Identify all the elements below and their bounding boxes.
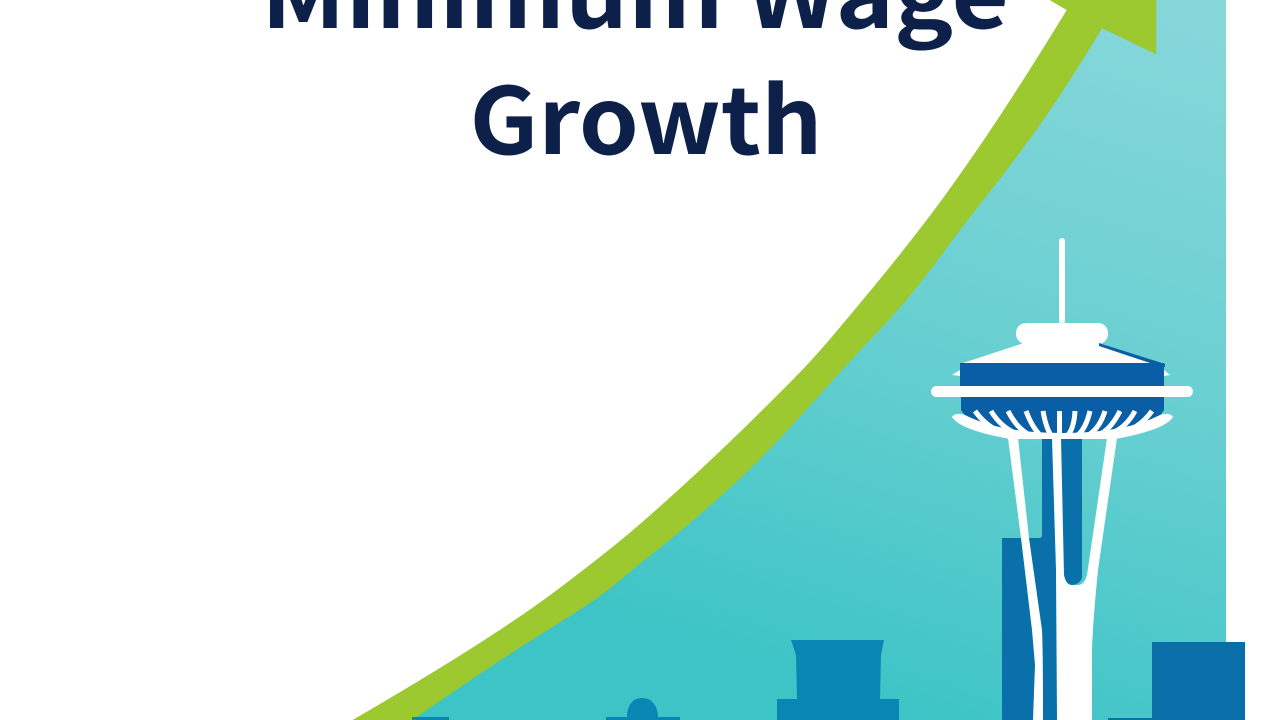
tower cap <box>1016 323 1108 344</box>
title: Growth <box>470 48 822 181</box>
blue bowl <box>961 397 1164 435</box>
antenna <box>1059 238 1065 324</box>
tower white body and right leg <box>1052 438 1117 720</box>
building: small dome <box>606 698 680 720</box>
building: tall behind tower <box>1002 438 1060 720</box>
tower blue core <box>1058 438 1082 585</box>
small roof tips <box>952 370 1170 376</box>
white deck ring <box>931 386 1193 397</box>
white saucer <box>952 414 1173 439</box>
observation deck blue band <box>960 363 1164 387</box>
title <box>261 0 1009 181</box>
bowl ribs <box>975 411 1152 436</box>
roof blue edge <box>1099 343 1165 367</box>
building: right block <box>1152 642 1245 720</box>
teal area under the growth curve <box>400 0 1226 720</box>
skyline buildings <box>412 438 1245 720</box>
building: far left <box>412 717 449 720</box>
icon: space needle tower <box>931 238 1193 720</box>
growth arrow <box>353 0 1156 720</box>
building: central stepped <box>777 640 899 720</box>
building: right low <box>1108 718 1152 720</box>
roof <box>960 343 1160 364</box>
tower left leg <box>1008 438 1043 720</box>
